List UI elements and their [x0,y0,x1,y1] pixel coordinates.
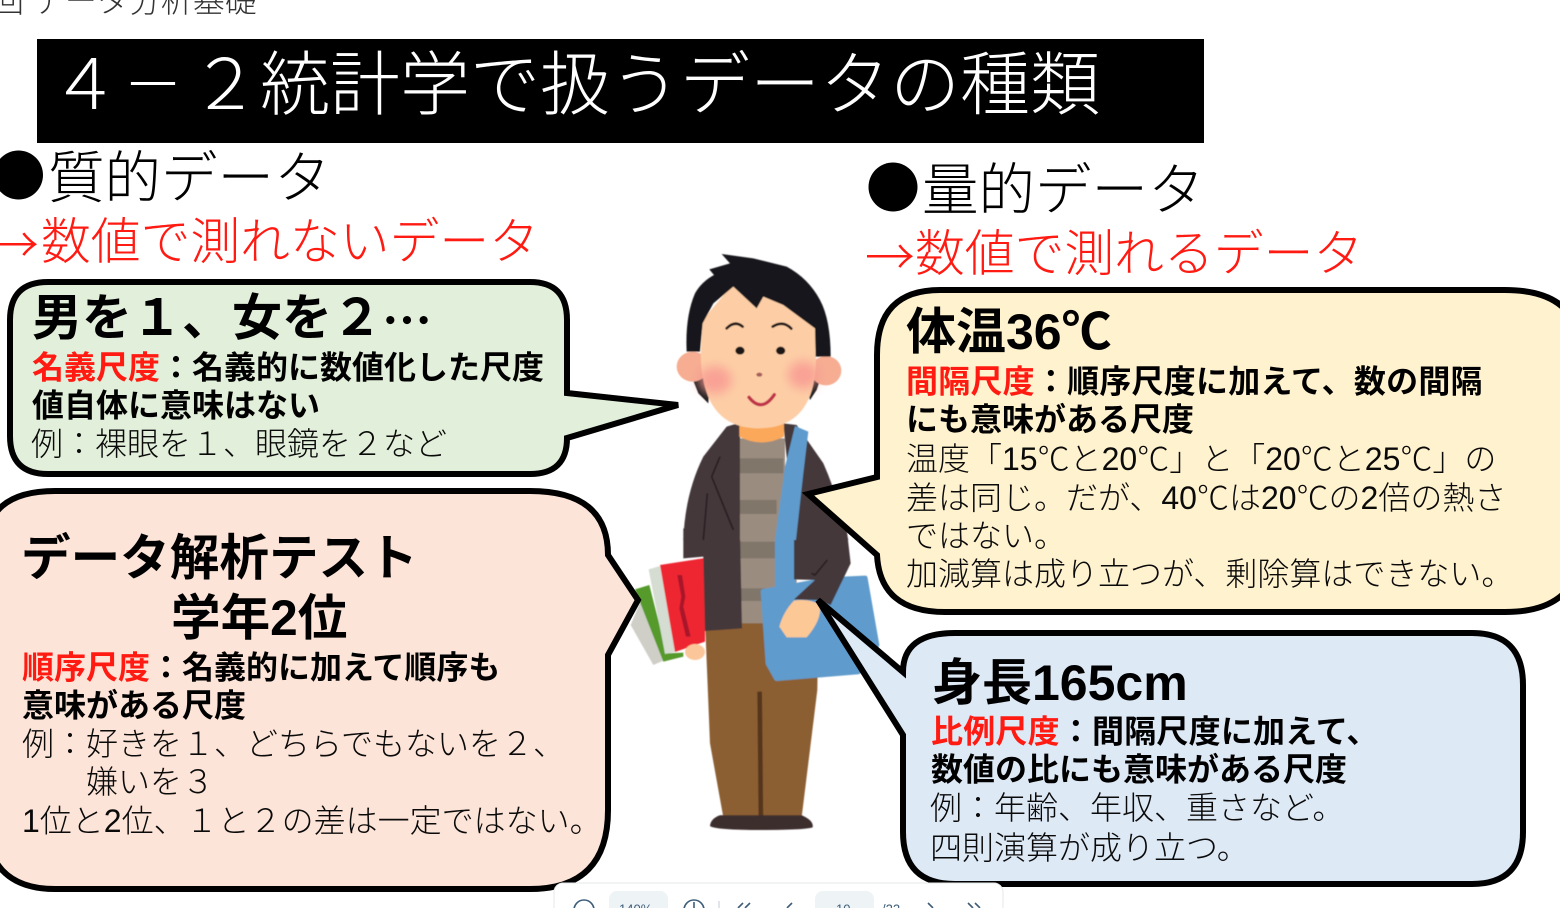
shirt [740,438,785,540]
callout body: 加減算は成り立つが、剰除算はできない。 [906,556,1513,592]
callout heading: 男を１、女を２… [32,282,432,354]
callout body: 比例尺度：間隔尺度に加えて、 [931,714,1379,750]
illustration: student with books and bag [631,254,877,830]
strap [775,528,796,590]
callout heading: 体温36℃ [906,304,1112,360]
nose [756,373,762,377]
callout body [930,714,1379,866]
callout body: ではない。 [906,518,1066,554]
title: ４ [50,46,120,124]
trousers [705,620,818,817]
callout body [906,364,1513,592]
shoes [710,815,813,830]
callout heading: 身長165cm [932,655,1188,711]
callout body: にも意味がある尺度 [906,402,1194,438]
callout heading: 学年2位 [171,590,347,646]
mouth [749,395,774,405]
PDF viewer toolbar [554,883,1003,908]
heading: quantitative data [865,158,1363,290]
callout body: 名義尺度：名義的に数値化した尺度 [32,350,544,386]
jacket [683,423,741,540]
callout body: 数値の比にも意味がある尺度 [931,752,1347,788]
callout body: 間隔尺度：順序尺度に加えて、数の間隔 [906,364,1483,400]
heading: quantitative data: 量的データ [922,158,1204,222]
title: ２統計学で扱うデータの種類 [190,46,1100,124]
lower body [631,528,877,830]
face [701,283,817,428]
callout: ratio scale [818,600,1523,884]
callout heading [21,530,418,646]
hand [779,600,820,637]
ears [677,352,709,382]
bag [763,578,877,678]
callout body: 温度「15℃と20℃」と「20℃と25℃」の [906,441,1496,477]
right sleeve [794,528,851,605]
callout body: 順序尺度：名義的に加えて順序も [22,650,500,686]
eyes [735,347,745,355]
callout: ordinal scale [0,491,638,889]
upper body [677,254,848,540]
callout body: 例：年齢、年収、重さなど。 [930,790,1344,826]
hair [686,254,831,357]
callout heading: データ解析テスト [21,530,418,586]
back hair [692,377,820,403]
heading: qualitative data: 数値で測れないデータ [41,214,539,270]
eyebrows [727,324,791,329]
callout body: 意味がある尺度 [22,688,246,724]
callout body: 例：好きを１、どちらでもないを２、 [22,726,565,762]
callout body: 嫌いを３ [86,764,214,800]
title [37,39,1204,143]
heading: qualitative data: 質的データ [48,146,330,210]
left jacket [683,528,742,631]
callout body: 例：裸眼を１、眼鏡を２など [31,426,447,462]
callout body: 値自体に意味はない [32,388,320,424]
callout body [31,350,544,462]
callout body: 差は同じ。だが、40℃は20℃の2倍の熱さ [906,480,1506,516]
cheeks [698,366,732,394]
shirt [740,528,797,623]
callout: interval scale [808,290,1560,612]
books [631,558,705,665]
heading: quantitative data: 数値で測れるデータ [915,226,1363,282]
title: － [123,52,183,118]
heading: qualitative data [0,146,539,278]
callout: nominal scale [10,282,678,474]
callout body: 1位と2位、１と２の差は一定ではない。 [22,803,602,839]
callout body [22,650,602,839]
neck [739,420,784,442]
callout body: 四則演算が成り立つ。 [930,830,1249,866]
heading: quantitative data: → [865,218,915,290]
strap [775,426,808,540]
